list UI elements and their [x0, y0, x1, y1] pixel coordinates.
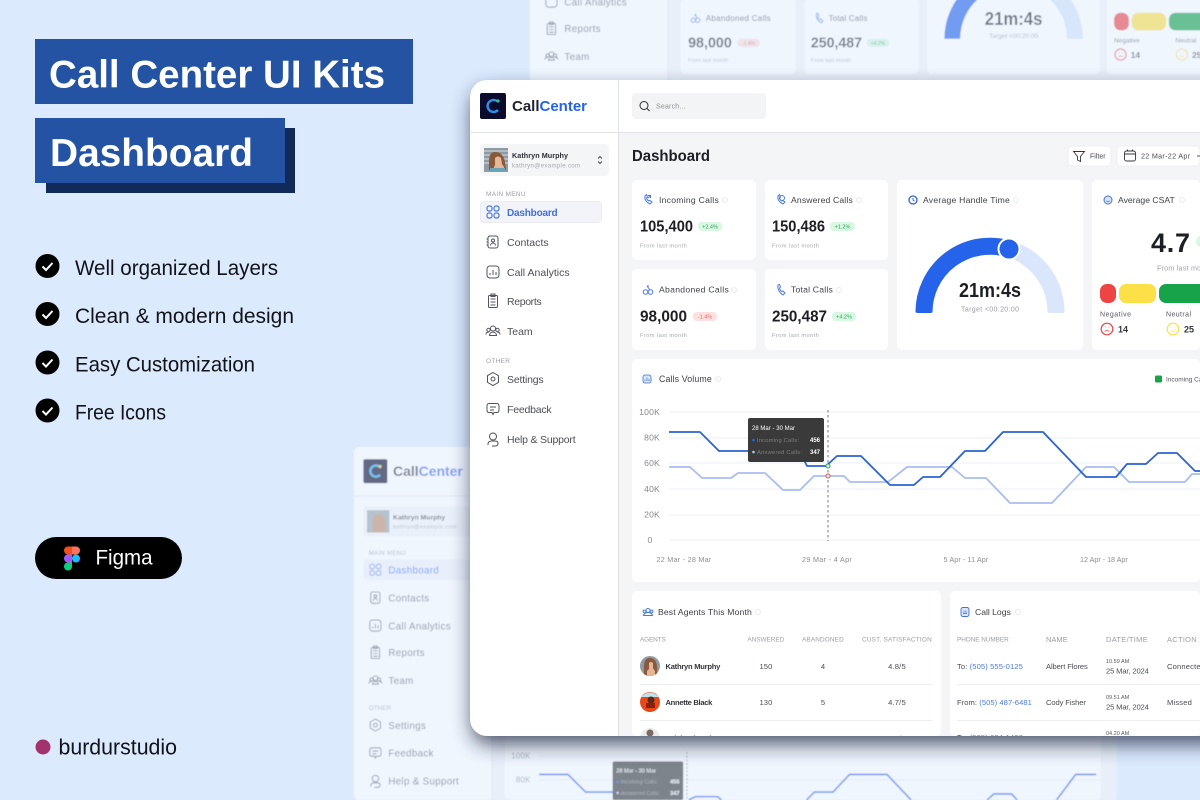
main dashboard window	[470, 80, 1200, 748]
tooltip: 347	[810, 450, 821, 456]
CSAT, top-right copy: Negative	[1114, 37, 1140, 44]
row: Albert Flores: 10.59 AM	[1106, 659, 1130, 665]
table head: DATE/TIME	[1106, 635, 1148, 644]
chart card, bottom-left copy: 456	[670, 780, 680, 786]
x axis labels: 12 Apr - 18 Apr	[1080, 555, 1128, 564]
x axis labels: 22 Mar - 28 Mar	[656, 555, 712, 564]
item: feedback: Feedback	[507, 404, 552, 416]
chart card, bottom-left copy: Incoming Calls:	[621, 780, 658, 786]
row: Annette Black: Annette Black	[666, 698, 713, 707]
title banner: line 2: Dashboard	[50, 132, 253, 175]
card: call logs table	[950, 591, 1200, 743]
date range button	[1117, 146, 1200, 166]
gauge target: Target <00:20:00	[961, 306, 1019, 314]
card: incoming calls: 105,400	[640, 218, 693, 236]
row: Kathryn Murphy: 4.8/5	[888, 662, 906, 671]
icon: agents	[643, 608, 653, 616]
item: contacts	[486, 236, 549, 249]
CSAT title: Average CSAT	[1118, 195, 1176, 205]
CSAT, top-right copy	[1107, 0, 1200, 74]
stat cards, top-right copy: From last month	[688, 58, 728, 64]
row: Kathryn Murphy: Kathryn Murphy	[666, 662, 721, 671]
row: Cody Fisher: 09.51 AM	[1106, 695, 1130, 701]
card: total calls: 250,487	[772, 308, 827, 326]
sidebar items, top-right copy: Team	[564, 52, 590, 63]
sidebar menu, bottom-left copy: Dashboard	[388, 565, 439, 576]
search box: Search...	[656, 104, 686, 110]
icon: clock	[909, 196, 917, 204]
x axis labels: 5 Apr - 11 Apr	[944, 555, 989, 564]
row: Cody Fisher: 25 Mar, 2024	[1106, 702, 1149, 712]
row: Ralph Edwards: 6	[821, 734, 825, 743]
hover dots	[826, 464, 830, 478]
gauge value: 21m:4s	[959, 280, 1021, 302]
sidebar menu, bottom-left copy: Feedback	[388, 749, 434, 760]
stat cards, top-right copy	[681, 0, 919, 74]
card: average handle time gauge	[897, 180, 1083, 350]
title banner: line 1: Call Center UI Kits	[49, 54, 385, 96]
sidebar items, top-right copy	[545, 0, 627, 63]
y axis labels: 80K	[644, 432, 660, 442]
card: incoming calls: From last month	[640, 244, 687, 250]
table head: ACTION	[1167, 635, 1197, 644]
item: reports	[488, 294, 542, 308]
row: Cody Fisher: Cody Fisher	[1046, 698, 1086, 707]
row: Cody Fisher: From: (505) 487-6481	[957, 698, 1032, 707]
card: abandoned calls: -1.4%	[698, 314, 712, 320]
stat cards, top-right copy: From last month	[811, 58, 851, 64]
card: incoming calls	[632, 180, 756, 260]
negative count: Negative	[1100, 312, 1131, 318]
main window shadow	[472, 90, 1200, 744]
row: Albert Flores: 25 Mar, 2024	[1106, 666, 1149, 676]
logo, bottom-left copy	[363, 459, 387, 483]
card: incoming calls: Incoming Calls	[659, 195, 719, 205]
card: answered calls: From last month	[772, 244, 819, 250]
neutral count	[1166, 312, 1194, 335]
row: Ralph Edwards: 110	[760, 734, 772, 743]
row: Ralph Edwards	[640, 728, 906, 748]
card: total calls: From last month	[772, 333, 819, 339]
chart card, bottom-left copy: 28 Mar - 30 Mar	[616, 769, 656, 775]
stat cards, top-right copy: Abandoned Calls	[706, 14, 771, 23]
card: answered calls: 150,486	[772, 218, 825, 236]
search box	[632, 93, 766, 119]
CSAT value: 4.7	[1151, 228, 1190, 258]
user box, bottom-left copy	[363, 507, 483, 536]
card: best agents table	[632, 591, 941, 748]
sidebar items, top-right copy: Reports	[564, 24, 601, 35]
page heading: Dashboard	[632, 148, 710, 165]
card: abandoned calls	[632, 269, 756, 350]
active item: dashboard: Dashboard	[507, 208, 558, 219]
sidebar menu, bottom-left copy: OTHER	[369, 706, 392, 712]
stat cards, top-right copy: +4.2%	[870, 41, 886, 47]
row: Jane Cooper	[957, 731, 1200, 743]
y axis labels	[639, 407, 660, 545]
sidebar menu, bottom-left copy: Contacts	[388, 593, 430, 604]
feature: free icons: Free Icons	[75, 400, 166, 424]
sidebar menu, bottom-left copy: Settings	[388, 721, 426, 732]
user profile box: kathryn@example.com	[512, 164, 580, 170]
row: Kathryn Murphy: 150	[759, 662, 773, 671]
sidebar menu, bottom-left copy	[363, 551, 476, 788]
tooltip: 28 Mar - 30 Mar	[752, 426, 795, 432]
row: Jane Cooper: Jane Cooper	[1046, 734, 1088, 743]
title banner: line 2	[35, 118, 295, 193]
row: Albert Flores: Albert Flores	[1046, 662, 1088, 671]
table head: CUST. SATISFACTION	[862, 636, 932, 644]
table head	[640, 636, 932, 644]
card: answered calls	[765, 180, 888, 260]
stat cards, top-right copy: Total Calls	[829, 14, 868, 23]
stat cards, top-right copy: 98,000	[688, 36, 732, 52]
card: total calls: Total Calls	[791, 284, 833, 294]
brand name: CallCenter	[512, 98, 587, 115]
sentiment bars	[1100, 284, 1200, 303]
chart title: Calls Volume	[659, 374, 712, 384]
negative count: 14	[1118, 324, 1128, 334]
feature: clean and modern design: Clean & modern design	[75, 304, 294, 328]
icon: call log	[961, 608, 969, 616]
item: call analytics: Call Analytics	[507, 267, 570, 279]
table head: ABANDONED	[802, 636, 844, 644]
item: feedback	[487, 404, 552, 416]
chart card, bottom-left copy: 100K	[511, 752, 531, 761]
tooltip	[748, 418, 824, 462]
icon: chart	[643, 375, 651, 383]
table head: NAME	[1046, 635, 1068, 644]
gauge, top-right copy: Target <00:20:00	[989, 33, 1038, 40]
filter button	[1068, 146, 1111, 166]
user box, bottom-left copy: kathryn@example.com	[393, 524, 457, 530]
menu caption other: OTHER	[486, 358, 510, 365]
sidebar menu	[480, 191, 602, 446]
stat cards, top-right copy: 250,487	[811, 36, 862, 52]
sidebar menu, bottom-left copy: Call Analytics	[388, 621, 451, 632]
hover marker line	[827, 410, 829, 541]
item: contacts: Contacts	[507, 237, 549, 249]
table head	[957, 635, 1197, 644]
card: answered calls: Answered Calls	[791, 195, 853, 205]
sidebar menu, bottom-left copy: Reports	[388, 648, 425, 659]
row: Albert Flores: To: (505) 555-0125	[957, 662, 1023, 671]
table head: AGENTS	[640, 636, 666, 644]
tooltip: Answered Calls:	[757, 450, 802, 456]
x axis labels	[656, 555, 1128, 564]
item: settings	[488, 372, 544, 386]
filter button: Filter	[1090, 154, 1106, 160]
sidebar menu, bottom-left copy: Help & Support	[388, 777, 459, 788]
y axis labels: 20K	[644, 510, 660, 520]
user profile box: Kathryn Murphy	[512, 151, 568, 160]
sidebar menu, bottom-left copy: Team	[388, 676, 414, 687]
card: total calls: +4.2%	[836, 314, 852, 320]
card: abandoned calls: Abandoned Calls	[659, 284, 729, 294]
feature: well organized layers: Well organized Layers	[75, 256, 278, 280]
tooltip: Incoming Calls:	[757, 438, 799, 444]
table head: ANSWERED	[748, 636, 785, 644]
negative count	[1100, 312, 1131, 335]
row: Annette Black	[640, 692, 906, 712]
row: Annette Black: 130	[759, 698, 773, 707]
CSAT, top-right copy: Neutral	[1175, 37, 1197, 44]
card: answered calls: +1.2%	[835, 224, 850, 230]
item: reports: Reports	[507, 296, 542, 308]
figma badge	[35, 537, 182, 579]
background window: top-right dashboard copy	[530, 0, 1200, 195]
table title: Best Agents This Month	[658, 607, 752, 617]
x axis labels: 29 Mar - 4 Apr	[802, 555, 852, 564]
table head: PHONE NUMBER	[957, 636, 1009, 644]
studio credit: burdurstudio	[58, 734, 177, 760]
card: abandoned calls: From last month	[640, 333, 687, 339]
CSAT, top-right copy: 14	[1131, 50, 1140, 60]
feature: free icons	[36, 398, 166, 424]
row: Annette Black: 4.7/5	[888, 698, 906, 707]
title banner: line 1	[35, 39, 413, 104]
line: answered calls	[669, 467, 1200, 503]
feature: easy customization: Easy Customization	[75, 352, 255, 376]
neutral count: 25	[1184, 324, 1194, 334]
chart card, bottom-left copy	[505, 706, 1101, 800]
row: Jane Cooper: To: (505) 624-1406	[957, 733, 1023, 742]
row: Annette Black: 5	[821, 698, 825, 707]
stat cards, top-right copy: -1.4%	[742, 41, 756, 47]
row: Kathryn Murphy: 4	[821, 662, 825, 671]
icon: smile	[1104, 196, 1112, 204]
row: Kathryn Murphy	[640, 656, 906, 676]
badge label: Figma	[96, 546, 153, 570]
background window: bottom-left dashboard copy	[354, 447, 1117, 800]
gridlines	[669, 412, 1200, 540]
card: calls volume chart	[632, 359, 1200, 582]
row: Cody Fisher	[957, 695, 1192, 712]
card: incoming calls: +2.4%	[702, 224, 718, 230]
card: average CSAT	[1092, 180, 1200, 350]
sidebar menu, bottom-left copy: MAIN MENU	[369, 551, 406, 557]
row: Cody Fisher: Missed	[1167, 698, 1192, 707]
y axis labels: 40K	[644, 484, 660, 494]
legend	[1155, 376, 1200, 384]
y axis labels: 100K	[639, 407, 660, 417]
chart card, bottom-left copy: 347	[670, 791, 680, 797]
chart card, bottom-left copy: Answered Calls:	[621, 791, 660, 797]
tooltip: 456	[810, 438, 821, 444]
item: help and support: Help & Support	[507, 434, 576, 446]
logo	[480, 93, 506, 119]
y axis labels: 60K	[644, 458, 660, 468]
brand name, bottom-left copy: CallCenter	[393, 463, 463, 479]
date range button: 22 Mar-22 Apr	[1141, 152, 1191, 160]
menu caption: MAIN MENU	[486, 191, 526, 198]
active item: dashboard	[480, 202, 602, 222]
gauge title: Average Handle Time	[923, 195, 1010, 205]
y axis labels: 0	[648, 535, 653, 545]
item: settings: Settings	[507, 374, 544, 386]
item: team	[486, 326, 532, 336]
gauge, top-right copy: 21m:4s	[985, 8, 1042, 29]
item: team: Team	[507, 326, 533, 338]
neutral count: Neutral	[1166, 312, 1191, 318]
table title: Call Logs	[975, 607, 1011, 617]
user profile box	[480, 144, 609, 176]
row: Ralph Edwards: 4.4/5	[888, 734, 906, 743]
chart card, bottom-left copy: 80K	[516, 775, 531, 784]
row: Ralph Edwards: Ralph Edwards	[666, 734, 716, 743]
row: Jane Cooper: 04.20 AM	[1106, 731, 1130, 737]
card: abandoned calls: 98,000	[640, 308, 687, 326]
icon: figma logo	[64, 546, 80, 570]
user box, bottom-left copy: Kathryn Murphy	[393, 515, 445, 522]
card: total calls	[765, 269, 888, 350]
line: incoming calls	[669, 432, 1200, 485]
gauge arc	[916, 238, 1064, 313]
gauge, top-right copy	[927, 0, 1100, 74]
row: Albert Flores	[957, 659, 1200, 676]
